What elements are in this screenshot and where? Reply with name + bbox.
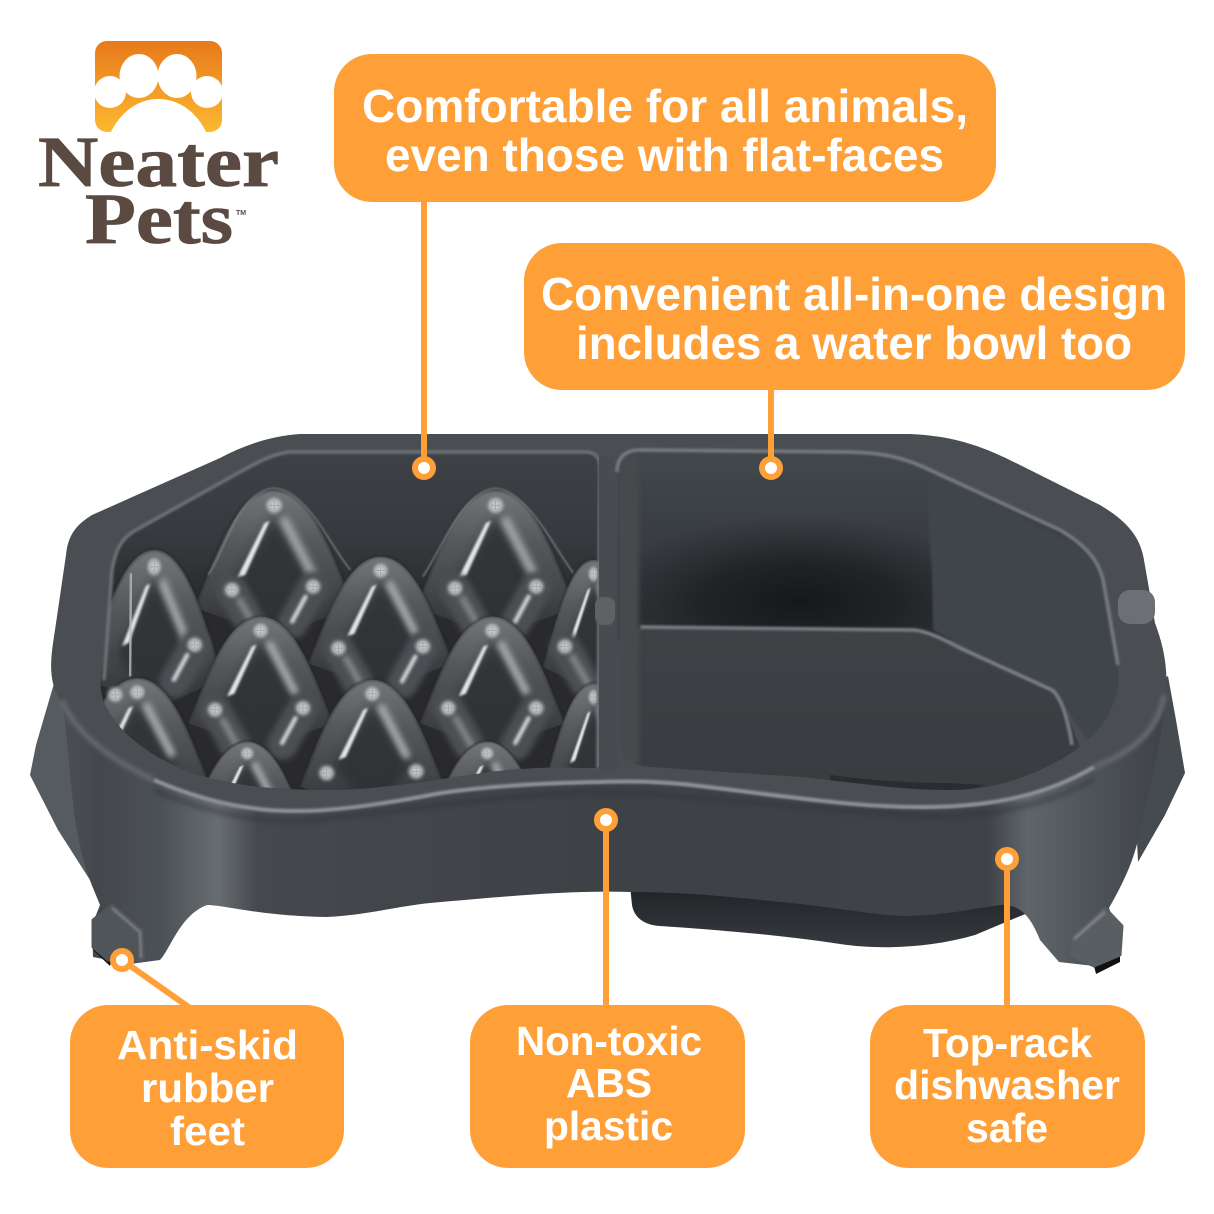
bowl outer wall bbox=[60, 690, 1166, 966]
connector: plastic bbox=[597, 811, 615, 1007]
back flaps bbox=[30, 676, 1185, 880]
callout: all-in-one: includes a water bowl too bbox=[576, 317, 1132, 369]
egg-shaped maze domes bbox=[65, 488, 644, 855]
right water basin bbox=[618, 453, 1118, 790]
connector: water bowl bbox=[762, 388, 780, 477]
callout: non-toxic: Non-toxic bbox=[516, 1018, 702, 1064]
left wall band bbox=[617, 455, 639, 765]
callout: dishwasher safe: dishwasher bbox=[894, 1062, 1120, 1108]
callout: non-toxic: plastic bbox=[544, 1103, 673, 1149]
right basin lip bbox=[617, 450, 1118, 665]
rim right fade bbox=[1094, 695, 1164, 767]
callout: dishwasher safe: Top-rack bbox=[923, 1020, 1092, 1066]
connector: dishwasher bbox=[998, 850, 1016, 1007]
callout: comfortable: even those with flat-faces bbox=[385, 129, 944, 181]
logo wordmark Neater: Neater bbox=[38, 122, 279, 202]
rim underside shadow bbox=[154, 779, 1094, 821]
right foot bbox=[1071, 908, 1122, 974]
callout: non-toxic bbox=[470, 1005, 745, 1168]
logo: Neater Pets bbox=[38, 41, 279, 259]
center divider bbox=[599, 456, 618, 770]
callout: comfortable bbox=[334, 54, 996, 202]
rim top surface bbox=[51, 434, 1167, 813]
callout: non-toxic: ABS bbox=[566, 1060, 652, 1106]
underside tray bbox=[630, 880, 1030, 947]
water side knob bbox=[1118, 590, 1155, 624]
basin floor bbox=[637, 628, 1080, 789]
divider knob bbox=[595, 597, 615, 625]
left slow-feed basin bbox=[100, 454, 599, 790]
right side wall bbox=[930, 534, 1118, 739]
front dark crescent bbox=[830, 775, 984, 790]
callout: dishwasher safe: safe bbox=[966, 1105, 1048, 1151]
icon: paw in orange square bbox=[85, 41, 232, 134]
callout: anti-skid: rubber bbox=[141, 1065, 274, 1111]
rim front highlight bbox=[154, 767, 1094, 811]
trademark: TM bbox=[236, 210, 246, 217]
callout: comfortable: Comfortable for all animals, bbox=[362, 80, 968, 132]
product: dual slow feeder bowl bbox=[30, 434, 1185, 974]
callout: all-in-one: Convenient all-in-one design bbox=[541, 268, 1167, 320]
connector: rubber feet bbox=[113, 951, 190, 1008]
callout: anti-skid: feet bbox=[170, 1108, 245, 1154]
floor step highlight bbox=[640, 627, 1072, 745]
basin back wall bbox=[618, 453, 1074, 640]
logo wordmark Pets: Pets bbox=[85, 179, 233, 259]
left foot bbox=[93, 905, 144, 966]
basin background bbox=[100, 454, 598, 790]
rim left fade bbox=[62, 700, 154, 780]
connector: bowl comfort bbox=[415, 200, 433, 477]
callout: anti-skid: Anti-skid bbox=[117, 1022, 298, 1068]
left basin lip bbox=[104, 452, 600, 768]
callout: all-in-one bbox=[524, 243, 1185, 390]
callout: dishwasher safe bbox=[870, 1005, 1145, 1168]
back wall shadow bbox=[651, 532, 932, 628]
callout: anti-skid bbox=[70, 1005, 344, 1168]
